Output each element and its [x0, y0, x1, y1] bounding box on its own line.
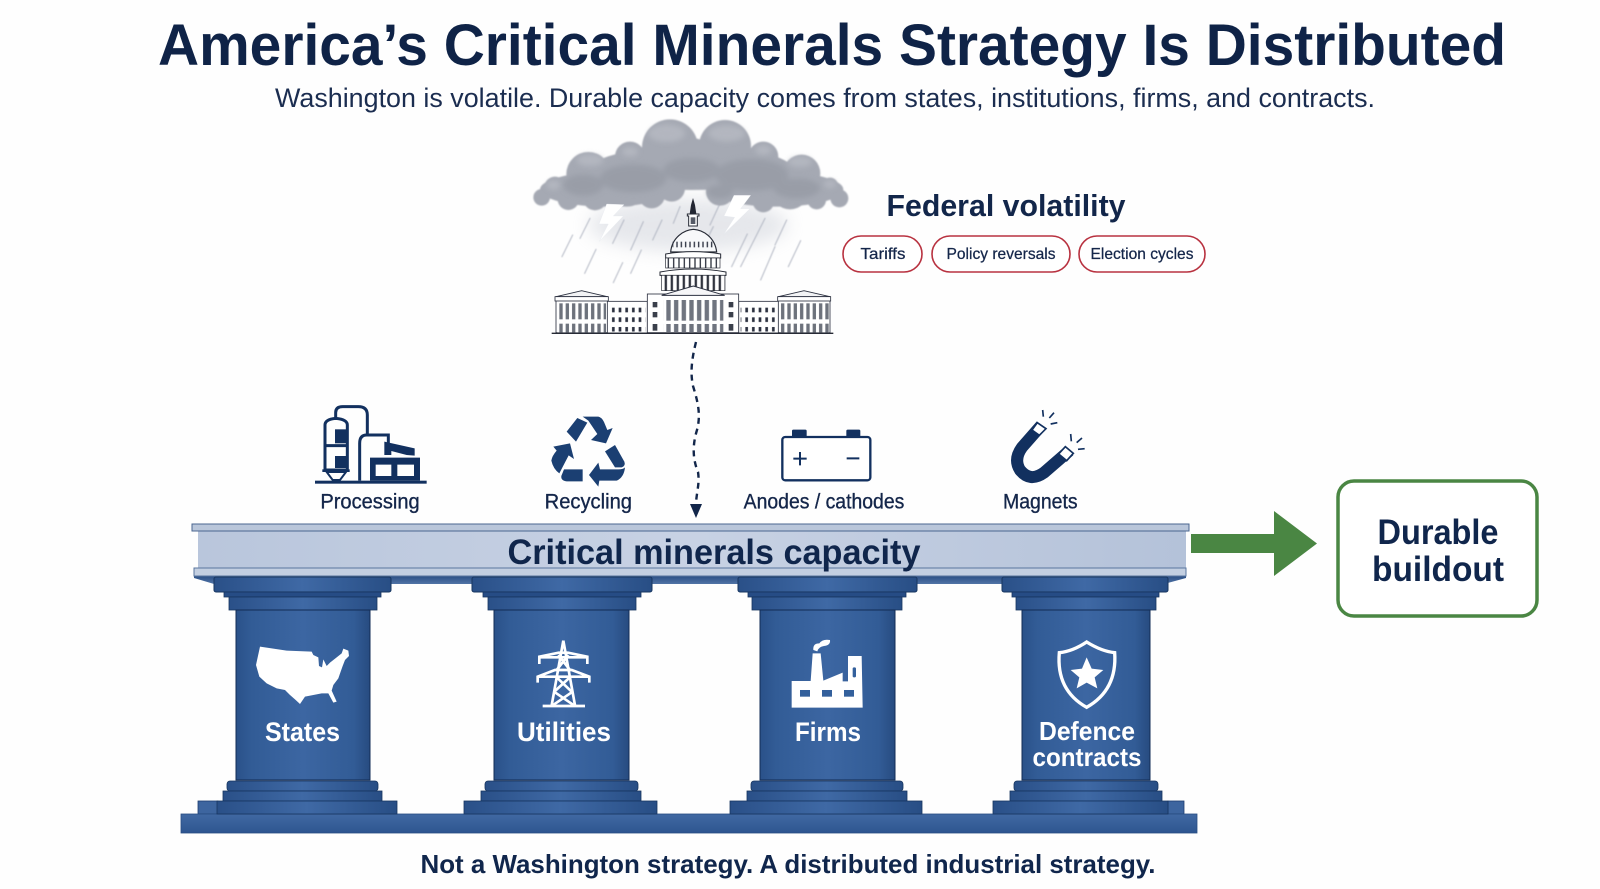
icon and label: recycling	[545, 417, 632, 513]
title: America’s Critical Minerals Strategy Is Distributed	[158, 13, 1506, 78]
box: durable buildout	[1338, 481, 1537, 616]
icon and label: processing: Processing	[320, 490, 420, 513]
left wing	[556, 297, 608, 333]
rain streaks	[562, 203, 801, 283]
pillar: firms: Firms	[795, 717, 861, 747]
beam: critical minerals capacity: Critical minerals capacity	[508, 533, 921, 572]
icon and label: processing	[315, 407, 427, 513]
pill: election cycles: Election cycles	[1090, 246, 1194, 263]
left connector	[607, 301, 647, 333]
pill: policy reversals	[932, 236, 1070, 272]
beam: critical minerals capacity	[192, 524, 1189, 584]
icon: transmission tower	[538, 641, 589, 706]
icon: factory	[792, 640, 863, 708]
cloud	[533, 119, 848, 212]
Capitol building	[552, 198, 833, 333]
plinth	[181, 801, 1197, 833]
icon and label: anodes and cathodes	[744, 430, 904, 513]
right connector	[739, 301, 779, 333]
icon and label: anodes and cathodes: Anodes / cathodes	[744, 490, 904, 513]
box: durable buildout: buildout	[1372, 550, 1504, 589]
lightning bolts	[599, 195, 751, 241]
pill: policy reversals: Policy reversals	[946, 246, 1056, 263]
pillar: states	[214, 577, 397, 814]
footer statement: Not a Washington strategy. A distributed industrial strategy.	[420, 849, 1156, 879]
statue and lantern	[690, 198, 696, 214]
icon: shield with star	[1059, 642, 1115, 707]
subtitle: Washington is volatile. Durable capacity comes from states, institutions, firms, and contracts.	[275, 83, 1375, 113]
pillar: defence contracts: contracts	[1032, 742, 1142, 772]
arrow: dashed volatile path down to the beam	[690, 342, 702, 518]
dome	[671, 229, 717, 252]
pillar: utilities: Utilities	[517, 717, 611, 747]
arrow: to durable buildout	[1191, 511, 1317, 576]
pill: tariffs	[843, 236, 922, 272]
heading: federal volatility: Federal volatility	[886, 188, 1126, 223]
pillar: defence contracts	[993, 577, 1168, 814]
pillar: firms	[730, 577, 922, 814]
illustration: storm cloud over the Capitol	[533, 119, 848, 333]
pillar: utilities	[464, 577, 657, 814]
icon and label: magnets	[1003, 410, 1085, 513]
pill: tariffs: Tariffs	[860, 246, 906, 263]
central block	[647, 294, 739, 333]
pillar: defence contracts: Defence	[1039, 716, 1135, 746]
icon and label: magnets: Magnets	[1003, 490, 1078, 513]
storm haze	[588, 198, 788, 252]
box: durable buildout: Durable	[1378, 513, 1498, 552]
icon: map of the United States	[256, 647, 349, 704]
pill: election cycles	[1079, 236, 1205, 272]
pillar: states: States	[265, 717, 340, 747]
right wing	[778, 297, 830, 333]
icon and label: recycling: Recycling	[545, 490, 632, 513]
